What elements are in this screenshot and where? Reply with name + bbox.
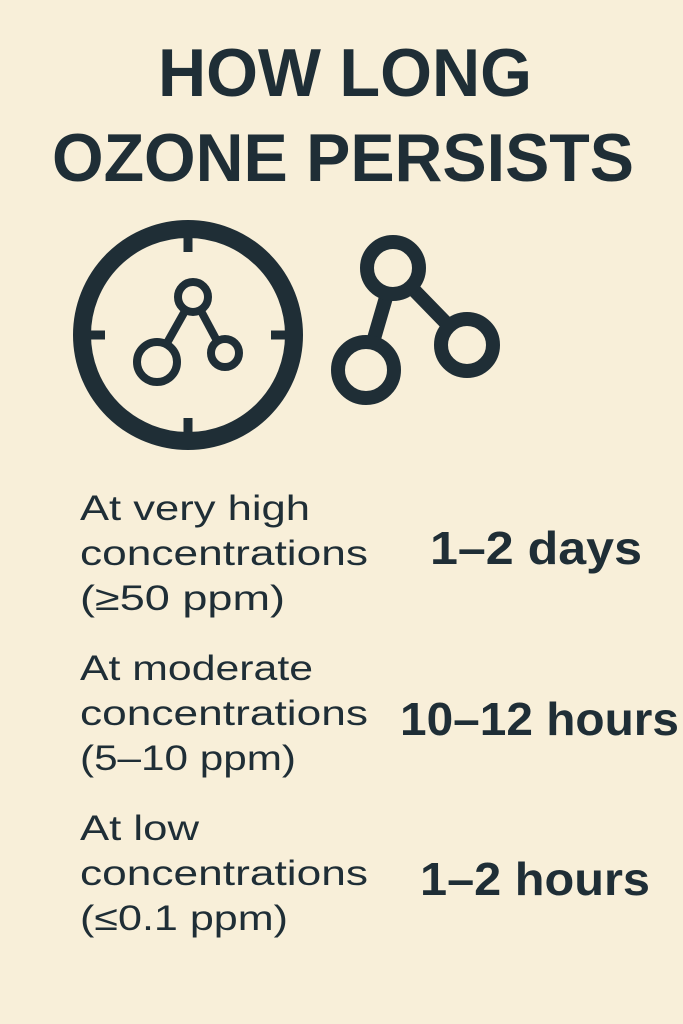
row: low: 1–2 hours (420, 853, 650, 905)
icon: molecule (338, 242, 493, 398)
row: very high: 1–2 days (430, 522, 642, 574)
row: moderate: (5–10 ppm) (80, 739, 296, 778)
title (52, 35, 634, 196)
row: very high: concentrations (80, 534, 368, 573)
icon: gauge with molecule (82, 229, 294, 441)
row: very high (80, 489, 642, 618)
row: low: (≤0.1 ppm) (80, 899, 288, 938)
row: very high: (≥50 ppm) (80, 579, 285, 618)
row: moderate: At moderate (80, 649, 313, 688)
row: very high: At very high (80, 489, 310, 528)
title: HOW LONG (158, 35, 532, 111)
row: low: concentrations (80, 854, 368, 893)
row: moderate (80, 649, 679, 778)
row: moderate: 10–12 hours (400, 693, 679, 745)
row: low: At low (80, 809, 200, 848)
row: moderate: concentrations (80, 694, 368, 733)
row: low (80, 809, 650, 938)
title: OZONE PERSISTS (52, 120, 634, 196)
